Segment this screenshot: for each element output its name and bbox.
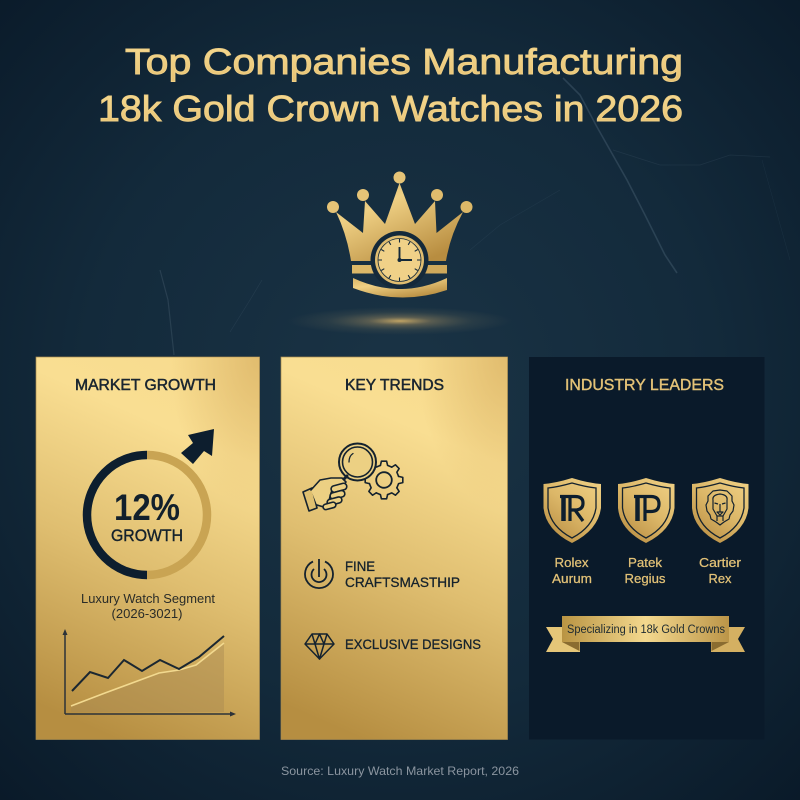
heading: industry leaders: INDUSTRY LEADERS — [565, 377, 724, 394]
icon: shield lion — [692, 478, 748, 543]
text: cartier rex — [699, 555, 742, 586]
text: luxury watch segment — [81, 592, 216, 621]
icon: shield R — [544, 478, 601, 543]
text: rolex aurum: Aurum — [552, 571, 592, 586]
line chart — [62, 629, 236, 716]
text: fine craftsmasthip — [345, 559, 460, 590]
leader: patek regius — [618, 478, 674, 586]
growth gauge — [87, 455, 207, 575]
text: cartier rex: Rex — [708, 571, 732, 586]
panel: market growth — [36, 357, 260, 740]
text: fine craftsmasthip: FINE — [345, 559, 375, 574]
trend: exclusive designs — [305, 634, 481, 659]
icon: gold crown with clock — [288, 172, 512, 335]
text: patek regius: Regius — [624, 571, 666, 586]
icon: power — [305, 559, 333, 588]
arrow: growth up — [181, 429, 214, 464]
ribbon: specializing — [546, 616, 745, 652]
source: Source: Luxury Watch Market Report, 2026 — [281, 764, 519, 778]
ribbon: specializing: Specializing in 18k Gold Crowns — [567, 624, 725, 636]
growth gauge: GROWTH — [111, 527, 183, 545]
icon: hand with magnifier and gear — [303, 444, 403, 511]
growth gauge: 12% — [114, 487, 180, 528]
heading: key trends: KEY TRENDS — [345, 377, 444, 394]
title: Top Companies Manufacturing — [125, 41, 683, 82]
panel: key trends — [281, 357, 508, 740]
icon: diamond — [305, 634, 334, 659]
title — [98, 41, 683, 129]
text: patek regius: Patek — [628, 555, 663, 570]
heading: market growth: MARKET GROWTH — [75, 377, 216, 394]
text: rolex aurum: Rolex — [554, 555, 589, 570]
text: fine craftsmasthip: CRAFTSMASTHIP — [345, 575, 460, 590]
text: exclusive designs: EXCLUSIVE DESIGNS — [345, 637, 481, 652]
text: rolex aurum — [552, 555, 592, 586]
text: cartier rex: Cartier — [699, 555, 742, 570]
text: luxury watch segment: (2026-3021) — [112, 607, 182, 621]
icon: shield P — [618, 478, 674, 543]
leader: cartier rex — [692, 478, 748, 586]
trend: fine craftsmanship — [305, 559, 460, 590]
text: luxury watch segment: Luxury Watch Segment — [81, 592, 216, 606]
title: 18k Gold Crown Watches in 2026 — [98, 88, 683, 129]
text: patek regius — [624, 555, 666, 586]
panel: industry leaders — [529, 357, 764, 740]
leader: rolex aurum — [544, 478, 601, 586]
